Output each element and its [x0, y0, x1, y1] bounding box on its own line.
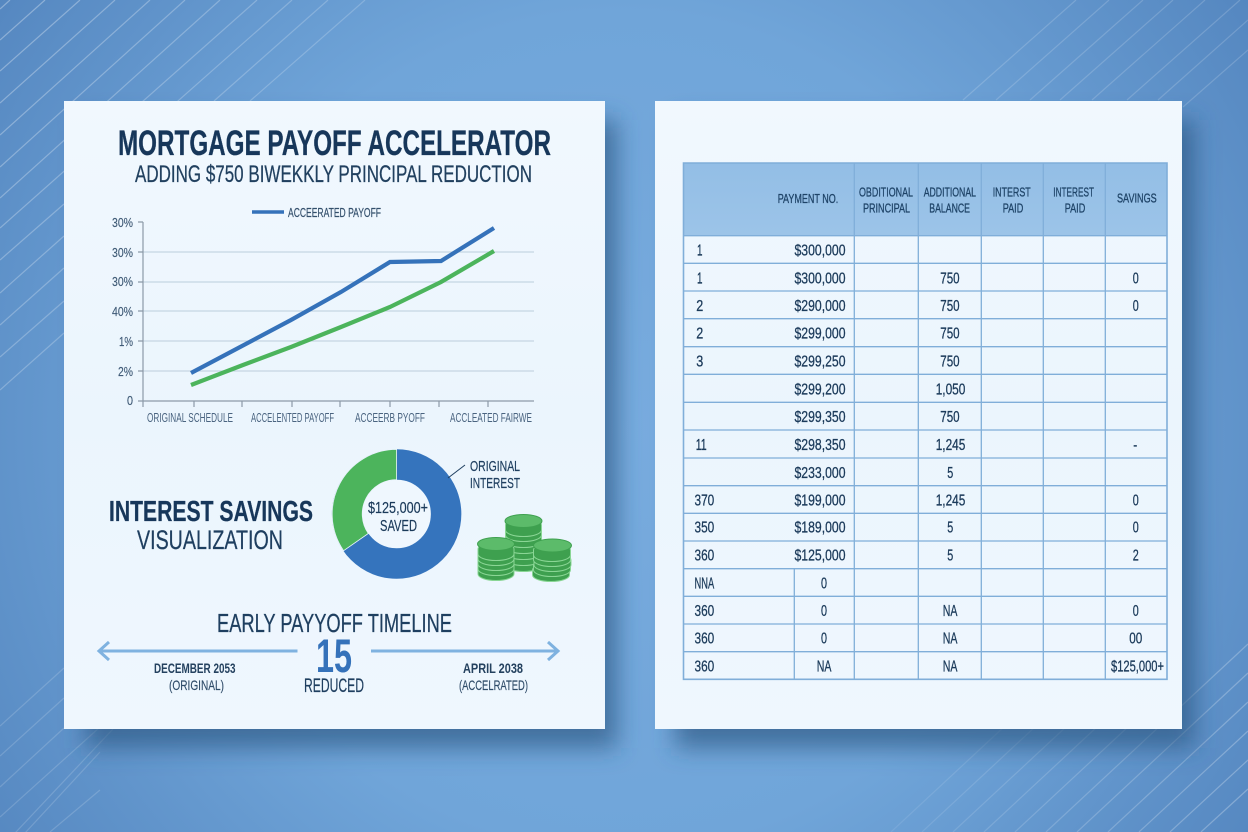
heading: interest savings: INTEREST SAVINGS: [109, 496, 313, 528]
table rows: 11: [696, 437, 707, 454]
table header: [684, 163, 1167, 236]
chart legend: [252, 205, 381, 220]
table rows: 0: [1133, 493, 1139, 510]
x axis labels: ORIGINAL SCHEDULE: [147, 410, 233, 425]
line: accelerated payoff: [191, 228, 494, 373]
chart legend: ACCEERATED PAYOFF: [288, 205, 381, 220]
table rows: 1: [697, 243, 703, 260]
stat: years reduced: REDUCED: [304, 676, 364, 697]
arrow: left timeline: [99, 642, 298, 660]
table rows: 370: [694, 493, 714, 510]
table rows: 1: [697, 270, 703, 287]
x axis labels: ACCEERB PYOFF: [355, 410, 425, 425]
table header: PRINCIPAL: [863, 200, 910, 215]
icon: coin stacks: [478, 514, 572, 582]
table rows: 2: [696, 326, 703, 343]
table rows: $290,000: [794, 298, 846, 315]
x axis labels: [147, 410, 532, 425]
table rows: $299,000: [794, 326, 846, 343]
table rows: $125,000: [794, 548, 846, 565]
table rows: NA: [817, 659, 832, 676]
title: MORTGAGE PAYOFF ACCELERATOR: [118, 124, 551, 163]
table rows: 360: [694, 659, 714, 676]
table header: SAVINGS: [1117, 191, 1157, 206]
table header: PAYMENT NO.: [778, 191, 838, 206]
table rows: 1,245: [936, 493, 965, 510]
table rows: $299,350: [794, 409, 846, 426]
table rows: $125,000+: [1111, 659, 1164, 676]
y axis labels: 0: [127, 393, 133, 408]
y axis labels: 30%: [112, 274, 133, 289]
donut center label: $125,000+: [368, 500, 428, 517]
label: accelerated date: [459, 660, 528, 693]
table rows: 750: [940, 298, 960, 315]
table rows: NA: [943, 603, 958, 620]
panel shadows: [85, 120, 1195, 748]
table rows: 750: [940, 354, 960, 371]
table rows: 0: [1133, 520, 1139, 537]
table rows: 750: [940, 409, 960, 426]
table header: PAID: [1003, 200, 1023, 215]
table rows: $189,000: [794, 520, 846, 537]
donut center label: [368, 500, 428, 535]
table header: INTEREST: [1053, 185, 1094, 200]
table rows: NA: [943, 659, 958, 676]
stat: years reduced: 15: [316, 629, 352, 682]
y axis labels: [112, 215, 133, 408]
x axis labels: ACCELENTED PAYOFF: [251, 410, 334, 425]
label: accelerated date: (ACCELRATED): [459, 677, 528, 693]
table rows: $299,200: [794, 381, 846, 398]
table rows: 5: [947, 520, 953, 537]
table rows: 00: [1129, 630, 1142, 647]
table header: OBDITIONAL: [859, 185, 913, 200]
label: original date: DECEMBER 2053: [154, 660, 236, 676]
donut chart: [332, 449, 446, 564]
heading: early payoff timeline: EARLY PAYYOFF TIMELINE: [217, 608, 452, 638]
table rows: 360: [694, 548, 714, 565]
line: original schedule: [191, 251, 494, 385]
table rows: $199,000: [794, 493, 846, 510]
y axis labels: 2%: [118, 364, 133, 379]
arrow: right timeline: [371, 642, 558, 660]
table rows: 360: [694, 603, 714, 620]
table rows: 350: [694, 520, 714, 537]
table header: ADDITIONAL: [924, 185, 976, 200]
table rows: $298,350: [794, 437, 846, 454]
table header: PAID: [1065, 200, 1085, 215]
callout: original interest: INTEREST: [470, 475, 520, 492]
table rows: $299,250: [794, 354, 846, 371]
label: original date: [154, 660, 236, 693]
table rows: NNA: [694, 575, 714, 592]
table rows: NA: [943, 630, 958, 647]
table rows: -: [1133, 437, 1137, 454]
line chart: [112, 205, 534, 425]
label: accelerated date: APRIL 2038: [463, 660, 523, 676]
table rows: 0: [1133, 603, 1139, 620]
table header: BALANCE: [929, 200, 970, 215]
table rows: 3: [696, 354, 703, 371]
table rows: 5: [947, 548, 953, 565]
table rows: 360: [694, 630, 714, 647]
table rows: 2: [696, 298, 703, 315]
table rows: 2: [1133, 548, 1139, 565]
heading: interest savings: VISUALIZATION: [137, 525, 283, 555]
label: original date: (ORIGINAL): [169, 677, 224, 693]
y axis labels: 1%: [119, 334, 133, 349]
stat: years reduced: [304, 629, 364, 697]
panel: mortgage summary: [64, 101, 605, 729]
donut center label: SAVED: [380, 518, 417, 535]
callout: original interest: [448, 458, 520, 492]
table rows: $300,000: [794, 270, 846, 287]
heading: interest savings: [109, 496, 313, 555]
chart axes: [138, 222, 534, 407]
table rows: $233,000: [794, 465, 846, 482]
table rows: 1,245: [936, 437, 965, 454]
subtitle: ADDING $750 BIWEKKLY PRINCIPAL REDUCTION: [135, 161, 532, 188]
table rows: 1,050: [936, 381, 965, 398]
y axis labels: 30%: [112, 215, 133, 230]
x axis labels: ACCLEATED FAIRWE: [450, 410, 532, 425]
table rows: 750: [940, 326, 960, 343]
table rows: 750: [940, 270, 960, 287]
table rows: 0: [1133, 298, 1139, 315]
table rows: 0: [1133, 270, 1139, 287]
table rows: $300,000: [794, 243, 846, 260]
table header: INTERST: [993, 185, 1031, 200]
panel: amortization table: [655, 101, 1182, 729]
y axis labels: 30%: [112, 245, 133, 260]
table rows: 0: [821, 630, 827, 647]
table rows: 5: [947, 465, 953, 482]
table: [684, 163, 1167, 679]
y axis labels: 40%: [112, 304, 133, 319]
table rows: 0: [821, 575, 827, 592]
table rows: [694, 243, 1164, 676]
table rows: 0: [821, 603, 827, 620]
callout: original interest: ORIGINAL: [470, 458, 520, 475]
